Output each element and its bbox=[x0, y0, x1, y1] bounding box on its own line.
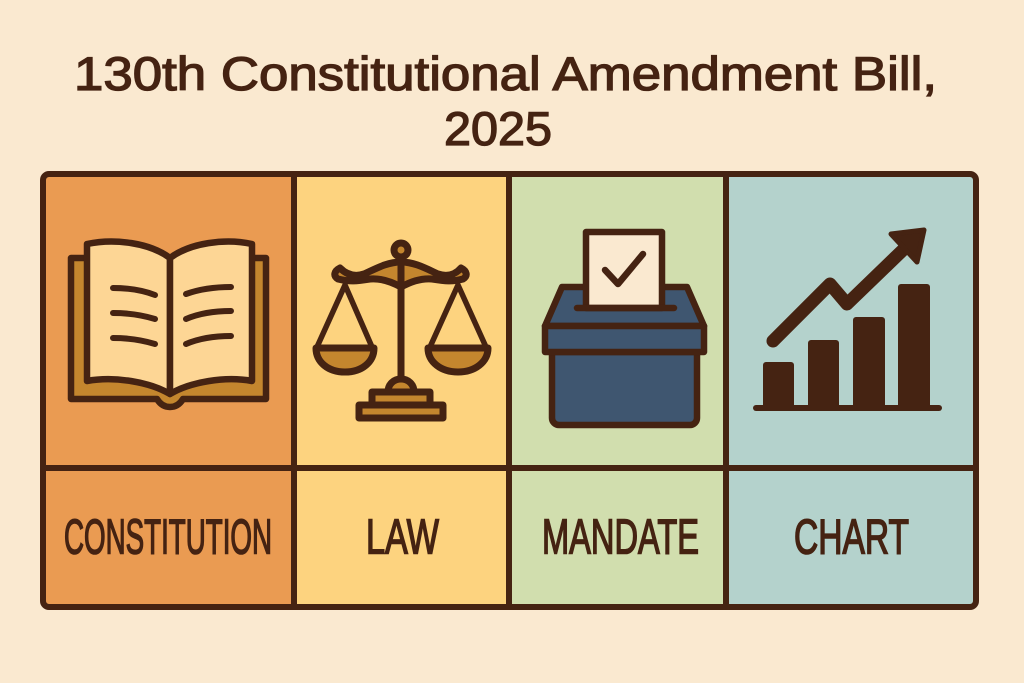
title: 2025 bbox=[444, 102, 552, 155]
icon: rising bar chart with arrow bbox=[753, 230, 942, 411]
title bbox=[74, 47, 937, 155]
label: chart: CHART bbox=[794, 510, 909, 564]
icon: open book bbox=[71, 242, 266, 407]
panel: mandate column fill bbox=[509, 174, 726, 607]
panel: chart column fill bbox=[726, 174, 976, 607]
panel: four-column grid bbox=[43, 174, 976, 607]
title: 130th Constitutional Amendment Bill, bbox=[74, 47, 937, 100]
label: constitution: CONSTITUTION bbox=[64, 510, 272, 564]
label: law: LAW bbox=[366, 510, 440, 564]
label: mandate: MANDATE bbox=[542, 510, 699, 564]
icon: scales of justice bbox=[316, 243, 488, 418]
panel: constitution column fill bbox=[43, 174, 294, 607]
panel: law column fill bbox=[294, 174, 509, 607]
icon: ballot box bbox=[545, 232, 704, 425]
